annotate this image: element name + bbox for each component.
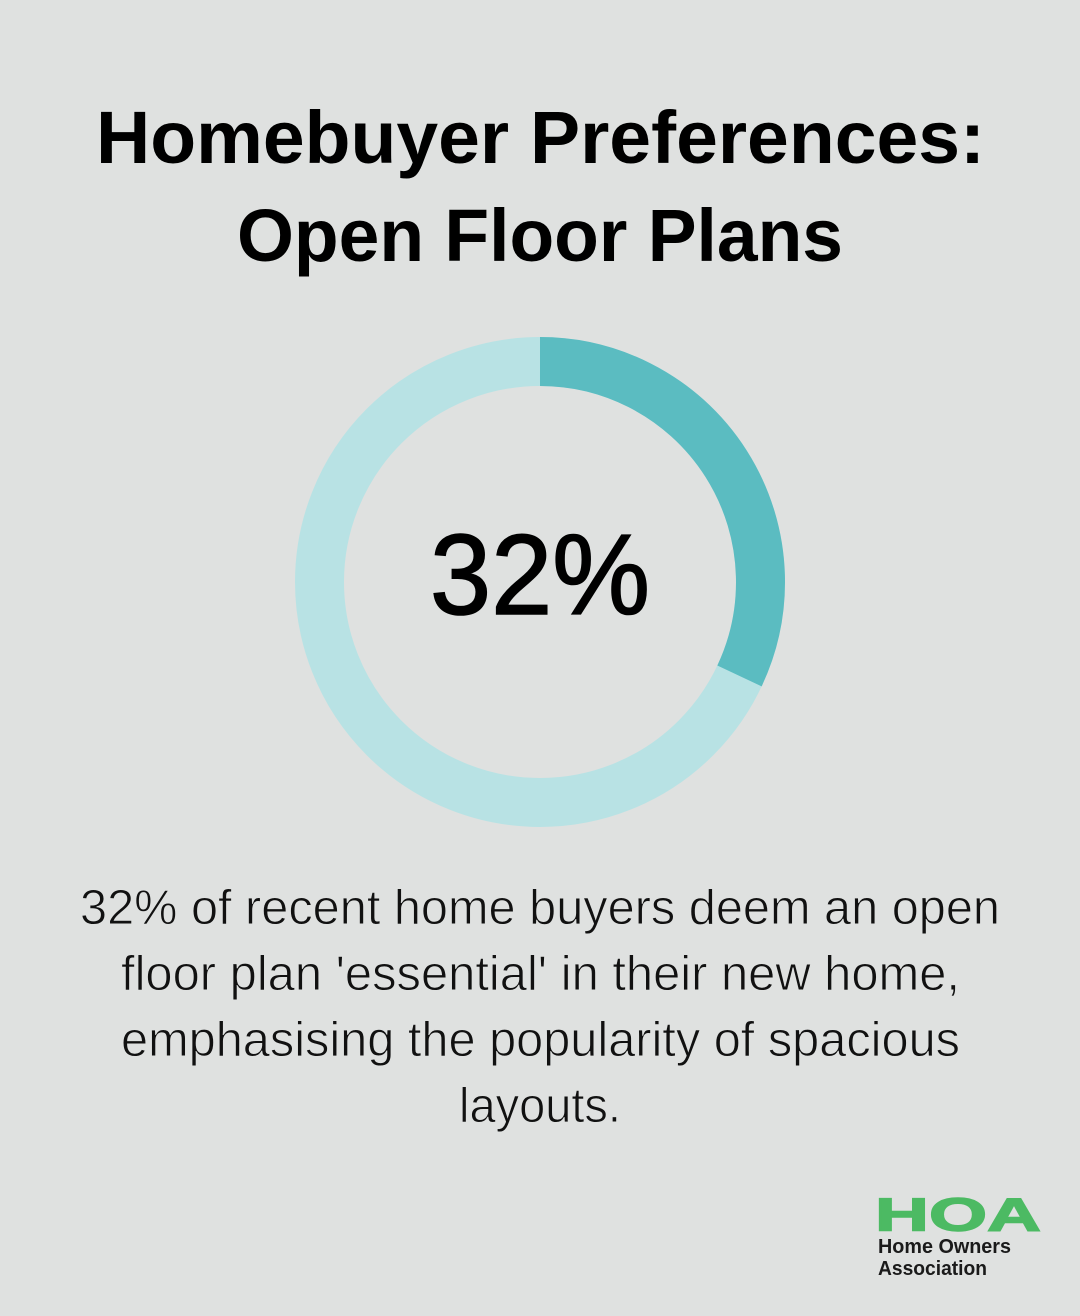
donut value label: 32%	[430, 512, 650, 639]
logo: Home Owners Association	[875, 1188, 1041, 1280]
title: Homebuyer Preferences:	[96, 96, 985, 179]
description text: emphasising the popularity of spacious	[121, 1013, 960, 1067]
logo name: Home Owners	[878, 1236, 1011, 1258]
donut track	[320, 362, 760, 802]
logo name: Association	[878, 1258, 987, 1280]
logo mark: HOA	[875, 1188, 1041, 1240]
description text: 32% of recent home buyers deem an open	[80, 881, 1000, 935]
description text: layouts.	[459, 1079, 621, 1133]
donut chart: 32 percent	[320, 362, 760, 802]
title: Open Floor Plans	[237, 194, 843, 277]
logo name	[878, 1236, 1011, 1280]
donut value arc	[540, 362, 760, 676]
title	[96, 96, 985, 277]
description text: floor plan 'essential' in their new home,	[121, 947, 960, 1001]
description text	[80, 881, 1000, 1133]
